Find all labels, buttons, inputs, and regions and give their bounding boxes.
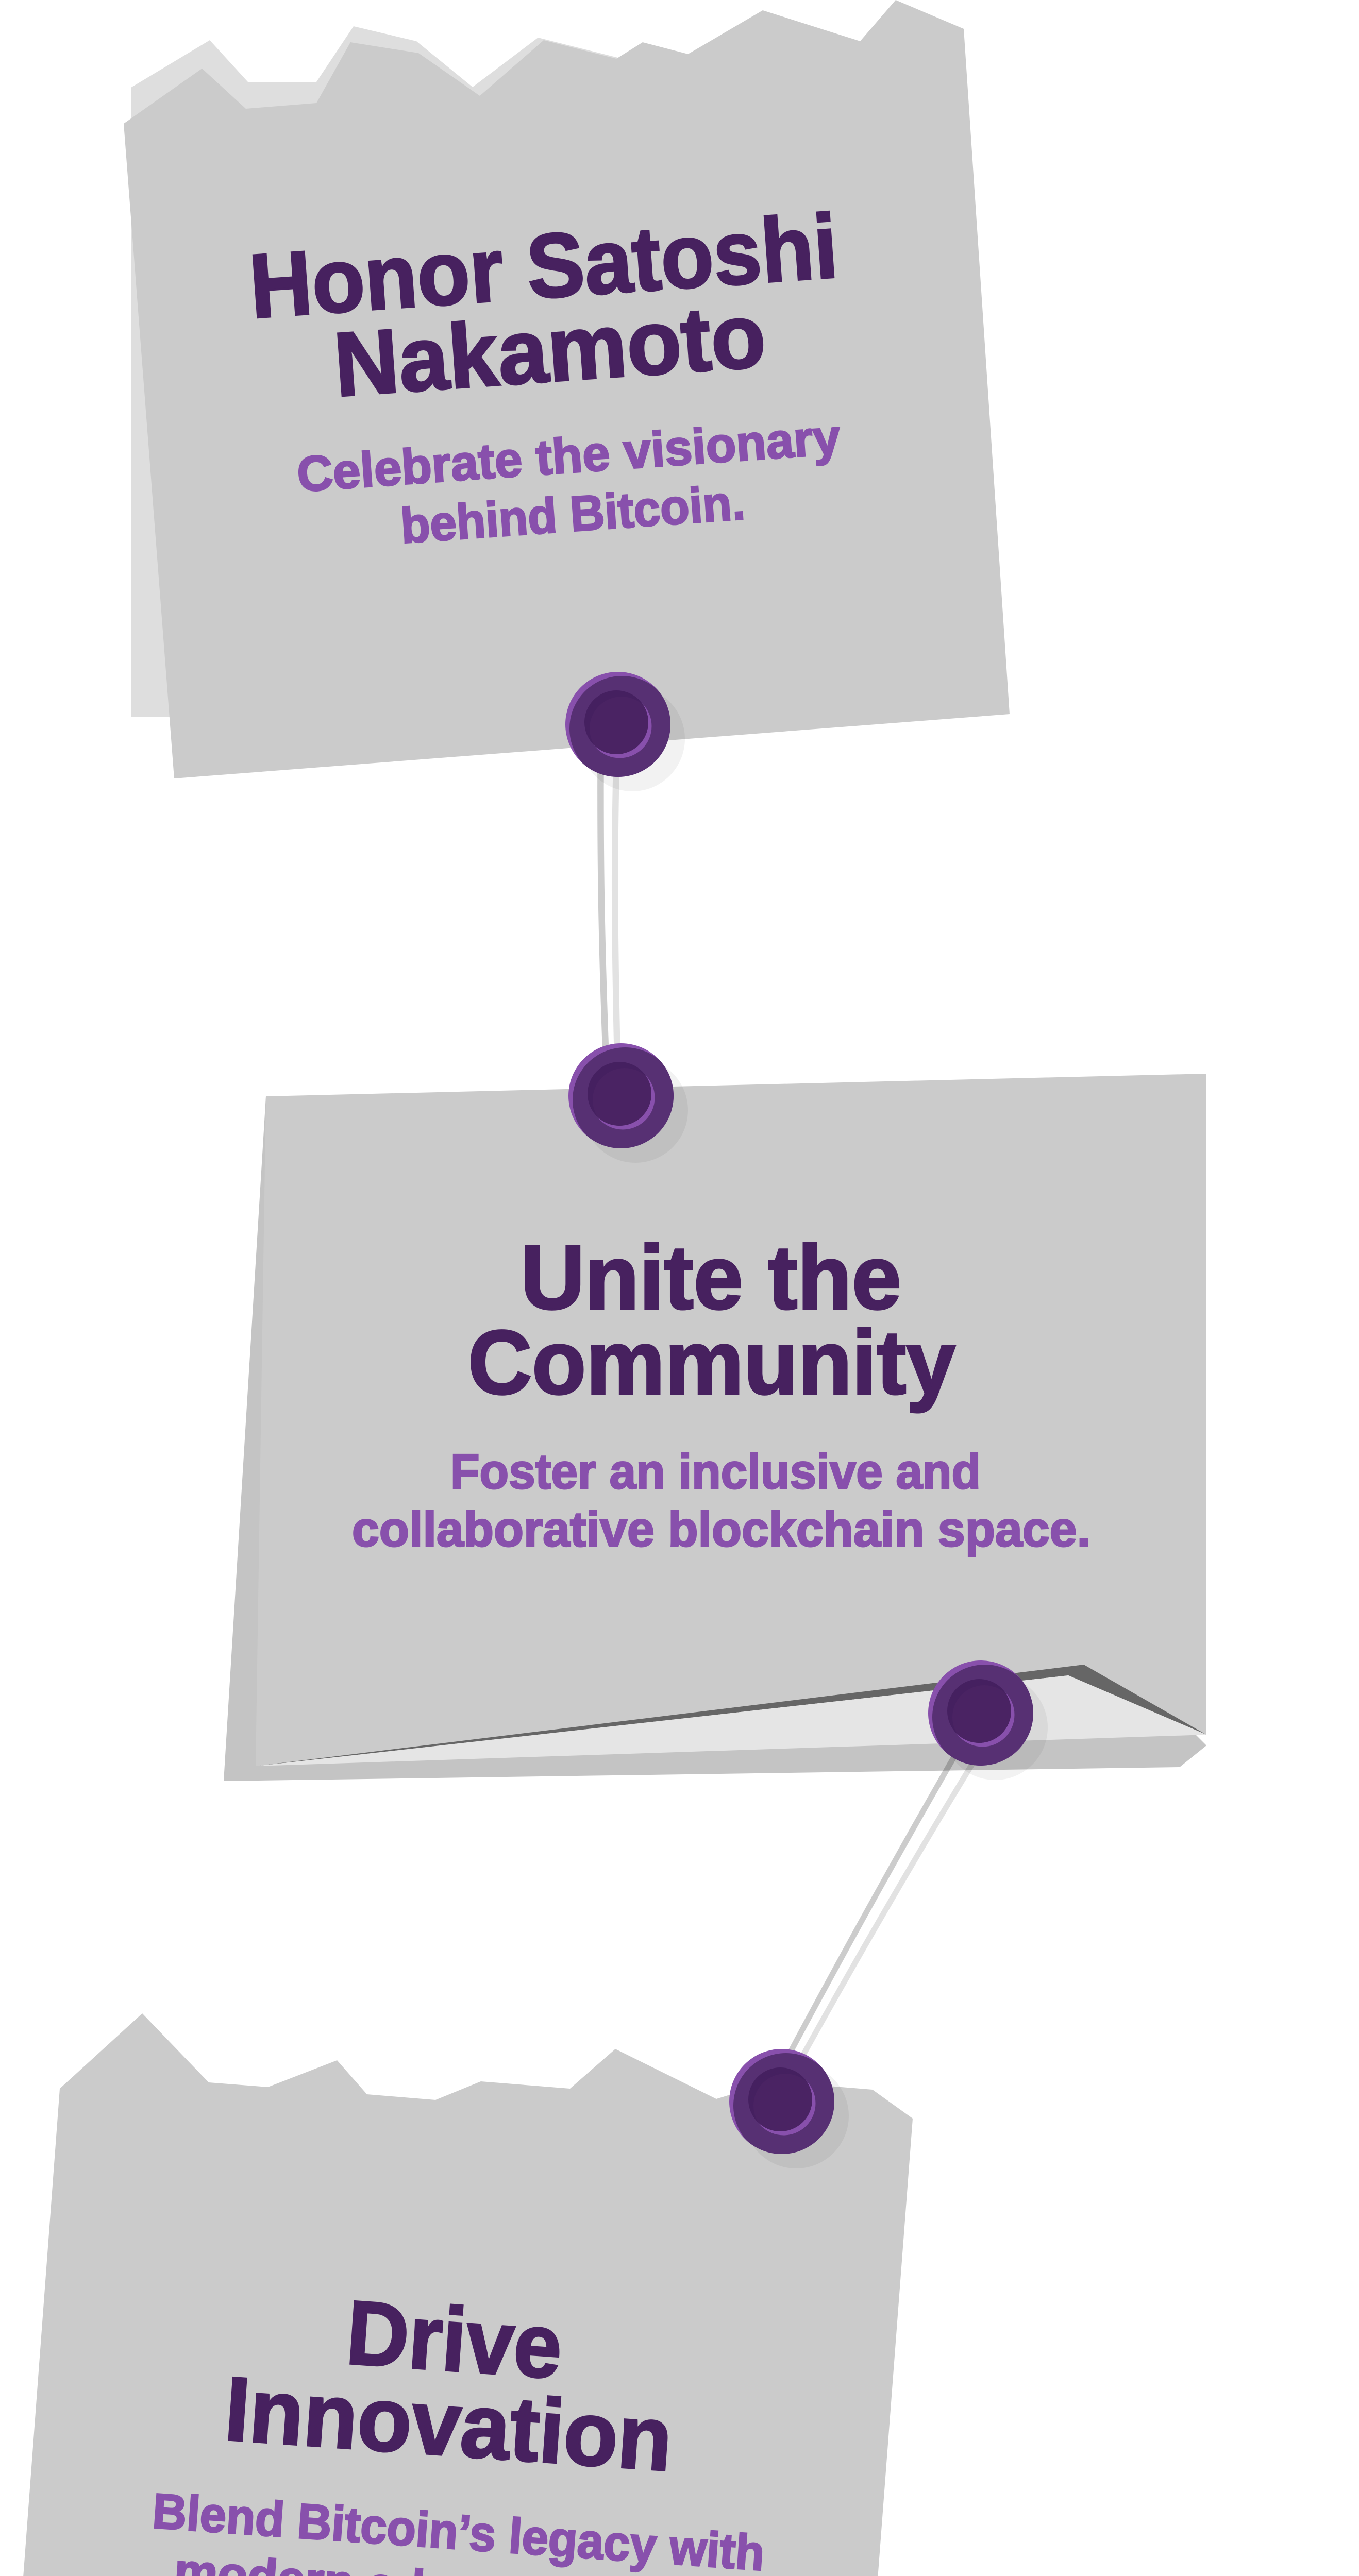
pin 1: [565, 672, 685, 791]
front sheet of torn note: [124, 0, 1010, 778]
panel: Drive Innovation note: [0, 2013, 913, 2576]
fold shadow: [256, 1665, 1206, 1766]
heading: Unite the Community: Community: [468, 1312, 955, 1413]
string between pin 3 and pin 4: [788, 1749, 977, 2058]
pin 4: [729, 2049, 849, 2168]
heading: Drive Innovation: [222, 2282, 676, 2490]
torn sheet: [0, 2013, 913, 2576]
text: Foster an inclusive and collaborative blockchain space.: collaborative blockchain space.: [352, 1502, 1090, 1557]
text: Foster an inclusive and collaborative blockchain space.: Foster an inclusive and: [450, 1444, 981, 1499]
back sheet of torn note: [131, 26, 618, 717]
folded corner: [256, 1675, 1206, 1766]
heading: Drive Innovation: Innovation: [222, 2358, 676, 2490]
string between pin 1 and pin 2: [600, 762, 617, 1061]
front sheet: [256, 1074, 1206, 1766]
text: Celebrate the visionary behind Bitcoin.: behind Bitcoin.: [399, 475, 747, 554]
back sheet: [224, 1096, 1206, 1781]
text: Celebrate the visionary behind Bitcoin.: Celebrate the visionary: [295, 410, 842, 502]
panel: Unite the Community note: [224, 1074, 1206, 1781]
pin 2: [568, 1043, 688, 1163]
heading: Honor Satoshi Nakamoto: [246, 196, 841, 416]
heading: Unite the Community: [468, 1227, 955, 1413]
pin 3: [928, 1660, 1048, 1780]
text: Celebrate the visionary behind Bitcoin.: [295, 410, 842, 554]
heading: Unite the Community: Unite the: [521, 1227, 901, 1328]
text: Foster an inclusive and collaborative blockchain space.: [352, 1444, 1090, 1557]
heading: Honor Satoshi Nakamoto: Honor Satoshi: [246, 196, 841, 337]
heading: Drive Innovation: Drive: [343, 2282, 565, 2398]
heading: Honor Satoshi Nakamoto: Nakamoto: [331, 285, 769, 416]
panel: Honor Satoshi Nakamoto note: [124, 0, 1010, 778]
